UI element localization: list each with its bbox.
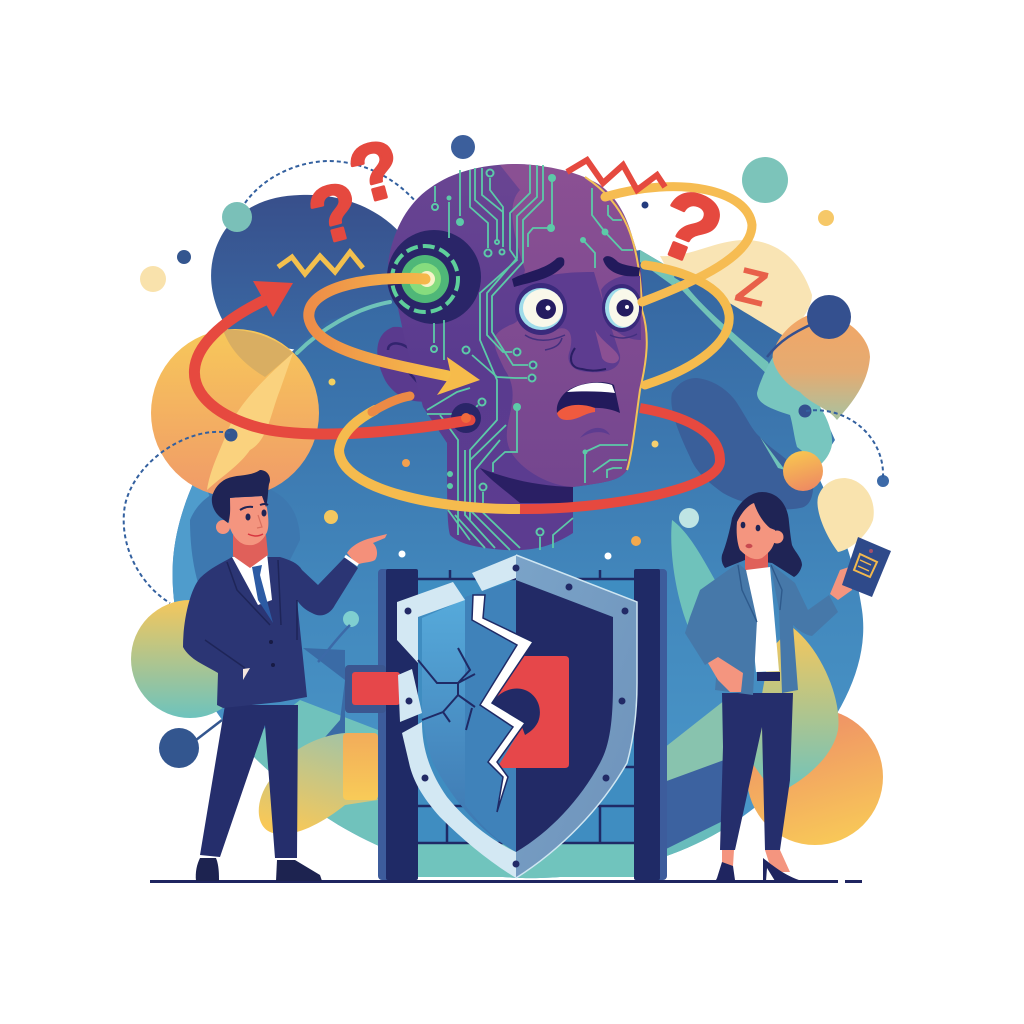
khaki overlap on orange circle <box>223 330 293 377</box>
left inner <box>422 580 516 852</box>
left darker band <box>465 580 516 852</box>
red ring right <box>520 408 720 509</box>
background blobs <box>130 195 883 890</box>
circuit traces <box>427 165 633 550</box>
waist <box>757 672 780 681</box>
face shadow <box>518 272 620 372</box>
swirl rings <box>194 187 752 509</box>
main blue blob <box>173 250 863 878</box>
shirt woman <box>746 567 779 672</box>
mouth woman <box>746 544 752 548</box>
right edge highlight <box>585 177 647 470</box>
hand <box>347 534 387 565</box>
right post <box>634 569 667 880</box>
dotted arcs <box>124 161 883 603</box>
left shoe <box>196 858 219 881</box>
brick wall <box>418 578 634 843</box>
yellow ring left <box>339 410 520 509</box>
ear inner <box>388 343 420 385</box>
pocket cuff <box>243 668 250 680</box>
right eye <box>602 284 642 332</box>
hand with book <box>830 567 852 600</box>
ear port <box>451 403 481 433</box>
red square <box>492 656 569 768</box>
hair back <box>722 492 802 577</box>
smile <box>248 534 263 536</box>
question mark 3: ? <box>642 168 736 288</box>
shirt <box>232 553 272 605</box>
ear <box>377 327 433 402</box>
hairline cracks <box>418 648 475 730</box>
eyebrows man <box>240 504 268 510</box>
face woman <box>737 503 775 559</box>
ground line <box>150 880 862 883</box>
gate <box>343 569 667 880</box>
nose man <box>257 515 262 528</box>
eye implant <box>387 230 481 324</box>
broken shield <box>397 555 637 878</box>
jacket <box>183 557 358 708</box>
cream blob top right <box>660 240 812 345</box>
neck woman <box>745 550 768 580</box>
neck <box>233 535 268 568</box>
latch backing <box>345 665 386 713</box>
peach blob right <box>773 313 870 420</box>
shoes woman <box>716 862 735 880</box>
keyhole <box>492 689 540 735</box>
right rim <box>516 555 637 878</box>
eye bags <box>525 334 637 350</box>
buttons <box>269 640 275 667</box>
question mark 2: ? <box>300 164 369 262</box>
eyes man <box>246 510 266 520</box>
light wedge on orange circle <box>207 353 293 490</box>
red swirl <box>194 300 470 434</box>
trousers woman <box>720 693 793 850</box>
orange arrowhead <box>437 357 480 395</box>
teal patch top <box>640 250 676 285</box>
head base <box>388 164 647 550</box>
left rim pieces <box>397 555 516 878</box>
orange ring segment <box>372 396 410 412</box>
eyebrows <box>512 257 564 287</box>
teal ring <box>297 302 390 353</box>
blazer left <box>685 563 757 695</box>
hand on hip <box>708 657 743 692</box>
circuit nodes <box>431 170 544 536</box>
orange circle left <box>151 329 319 497</box>
dark rounded shape <box>671 378 813 509</box>
left eye <box>515 283 567 335</box>
hair <box>212 470 270 523</box>
teal blob right <box>757 345 832 465</box>
woman in blazer <box>685 492 891 881</box>
decorative dots <box>140 135 889 768</box>
face light area <box>494 164 647 487</box>
navy blob top left <box>211 195 430 360</box>
blazer right <box>770 563 838 693</box>
red arrowhead <box>253 281 293 317</box>
yellow-green drop front <box>750 627 839 795</box>
red bar <box>352 672 400 705</box>
illustration <box>122 135 891 883</box>
crack <box>472 595 533 812</box>
nose <box>571 348 606 371</box>
blob inner shapes <box>130 238 813 890</box>
right eye socket <box>601 275 641 340</box>
yellow zigzag <box>278 252 363 274</box>
ear woman <box>770 530 784 544</box>
trousers <box>200 705 298 858</box>
chin crease <box>580 428 610 438</box>
orange swirl <box>309 278 448 376</box>
left post <box>378 569 418 880</box>
tie <box>252 565 273 623</box>
yellow blob bottom left <box>259 733 378 834</box>
book <box>842 537 891 597</box>
cuff <box>345 556 358 565</box>
teal base <box>418 845 634 877</box>
head <box>377 164 647 550</box>
man in suit <box>183 470 387 881</box>
rivets <box>404 564 628 868</box>
yellow-green drop behind woman <box>747 709 883 845</box>
red zigzag <box>567 160 665 190</box>
yellow block <box>343 733 378 800</box>
face <box>229 496 268 545</box>
yellow loop top right <box>605 187 752 302</box>
mouth <box>557 382 620 420</box>
right shoe <box>276 860 322 881</box>
orange ring right <box>645 265 729 385</box>
ear man <box>216 520 230 534</box>
question mark 1: ? <box>340 122 411 221</box>
lapels <box>205 560 297 668</box>
letter Z: Z <box>730 256 774 318</box>
port glow <box>461 413 471 423</box>
nose light <box>595 330 619 363</box>
cream drop <box>817 478 874 552</box>
eyes woman <box>741 522 760 531</box>
teal sliver <box>760 437 785 470</box>
teal stripe <box>674 278 769 372</box>
ankles <box>722 850 790 872</box>
right inner <box>516 580 613 852</box>
neck shadow <box>480 468 573 503</box>
green-yellow circle left <box>131 600 249 718</box>
lapel lines <box>738 565 782 622</box>
